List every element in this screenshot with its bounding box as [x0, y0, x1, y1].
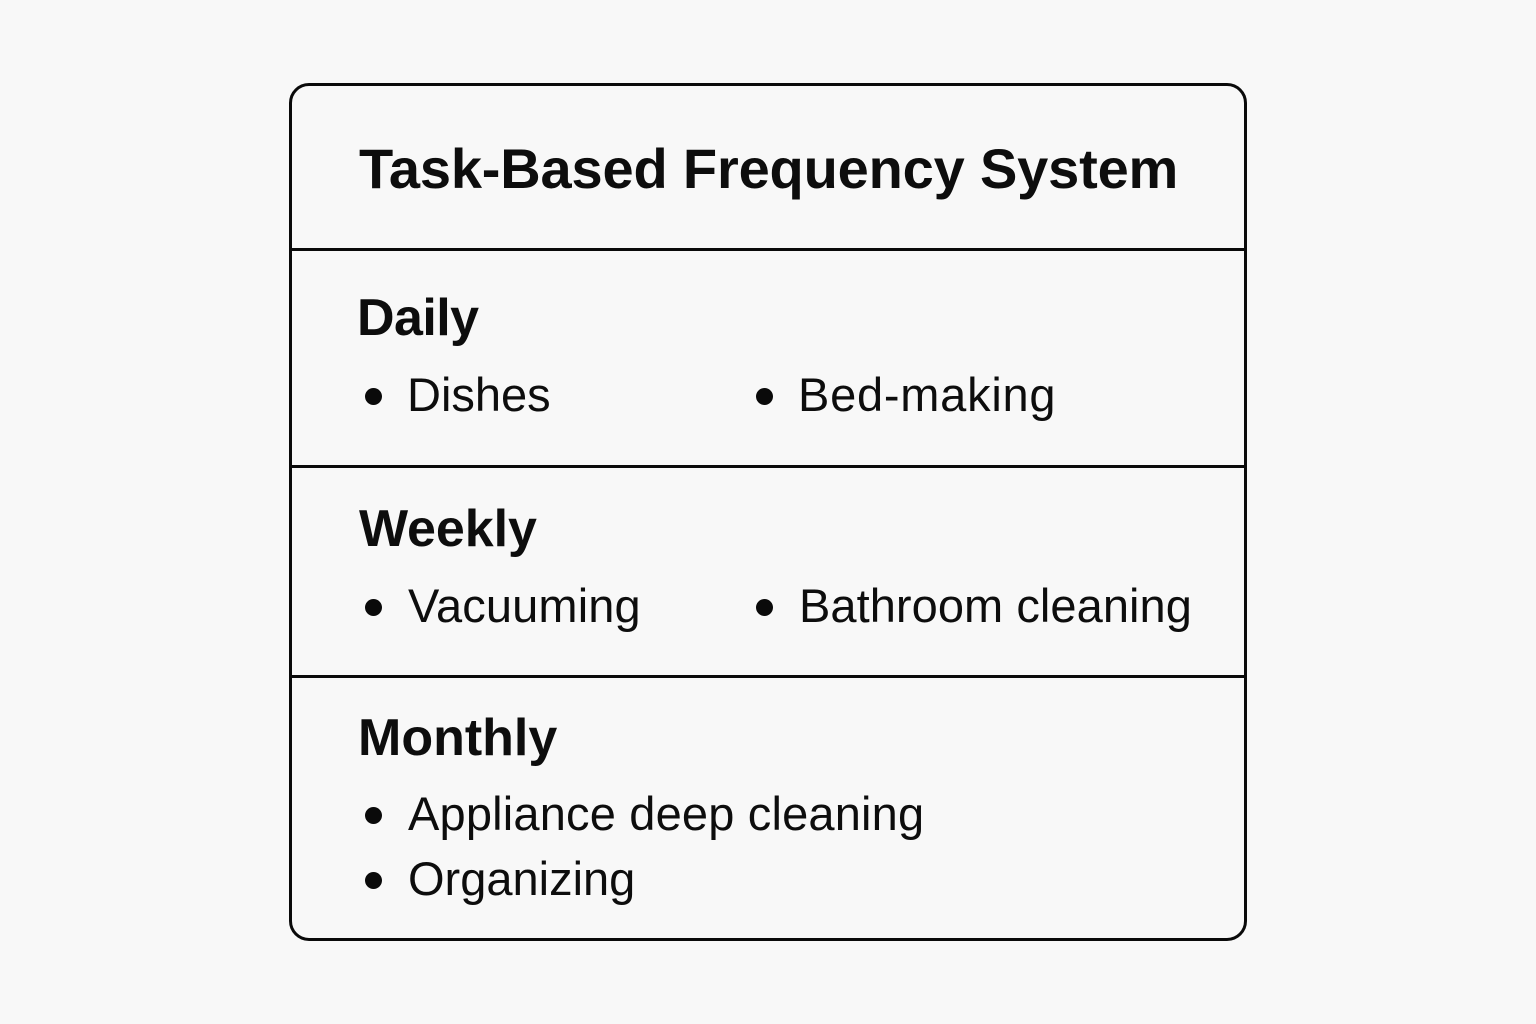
panel: daily — [357, 289, 1056, 421]
heading: weekly: Weekly — [359, 500, 537, 558]
panel: task frequency card — [289, 83, 1247, 941]
bullet: vacuuming: Vacuuming — [408, 579, 641, 632]
bullet: organizing: Organizing — [408, 852, 635, 905]
bullet: appliance deep cleaning: Appliance deep cleaning — [408, 787, 924, 840]
panel: monthly — [358, 709, 924, 905]
title: Task-Based Frequency System — [359, 137, 1178, 200]
panel: weekly — [359, 500, 1192, 632]
heading: daily: Daily — [357, 289, 478, 347]
bullet: bathroom cleaning: Bathroom cleaning — [799, 579, 1192, 632]
bullet: bed-making: Bed-making — [798, 368, 1056, 421]
bullet: dishes: Dishes — [407, 368, 551, 421]
heading: monthly: Monthly — [358, 709, 557, 767]
